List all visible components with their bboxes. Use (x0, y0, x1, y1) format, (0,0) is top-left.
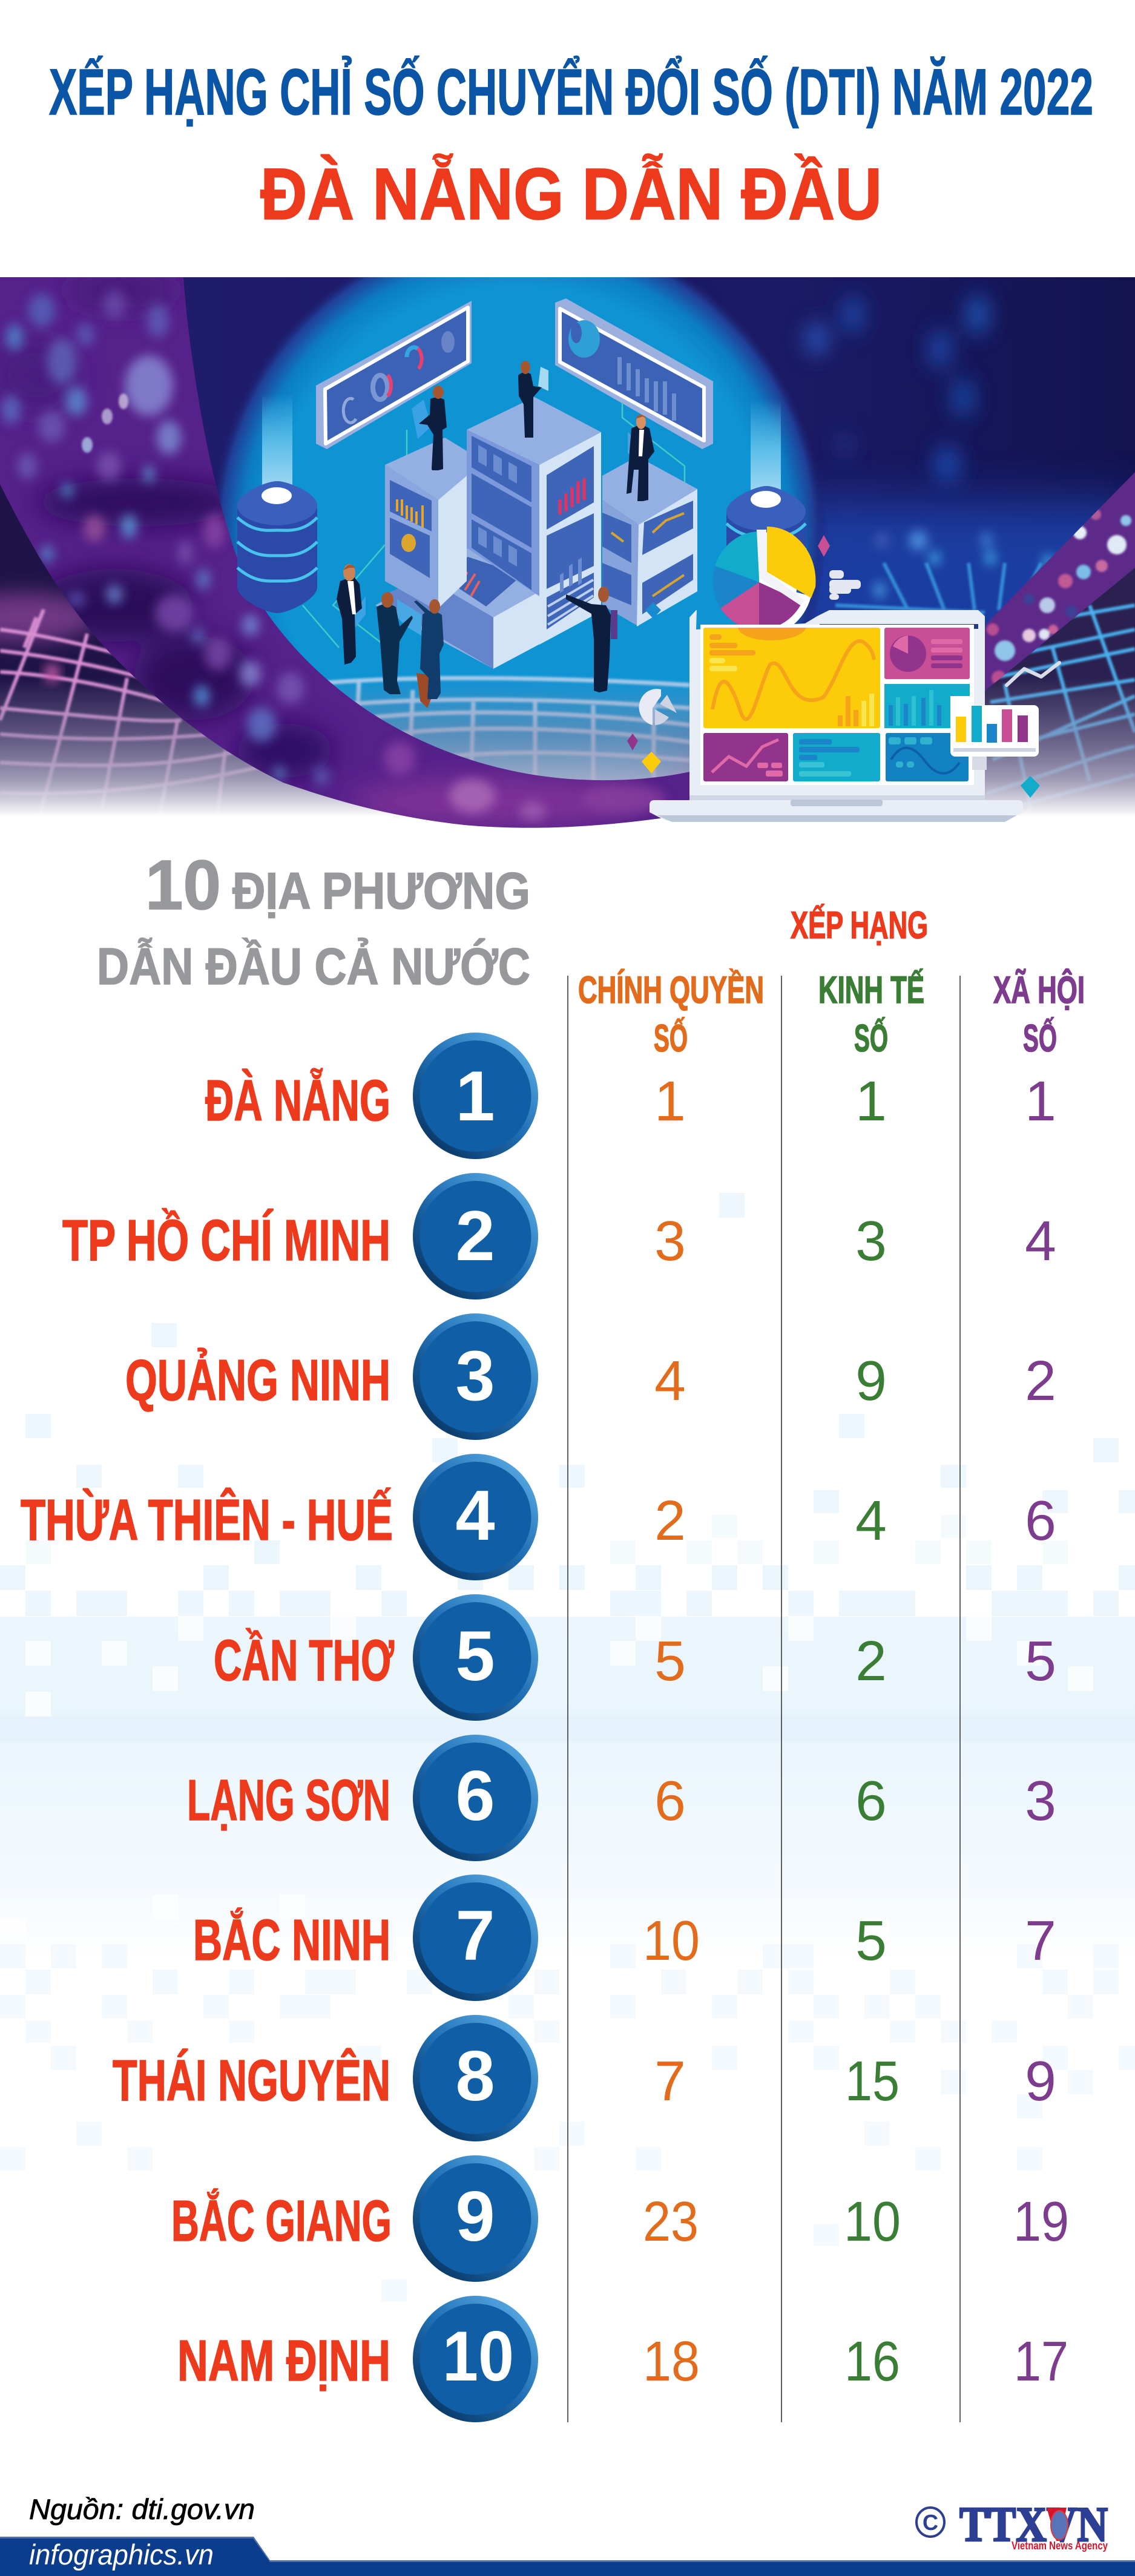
row 1 (205, 1033, 1056, 1159)
row 4: 4 (455, 1476, 495, 1555)
heading: ranking: XẾP HẠNG (791, 904, 928, 947)
row 9: 10 (844, 2190, 901, 2253)
hero bottom fade to white (0, 678, 1135, 841)
row 1: 1 (455, 1056, 495, 1135)
row 1: 1 (654, 1070, 686, 1132)
row 7: 10 (643, 1909, 700, 1972)
central cyan glow (218, 277, 824, 780)
row 6: LẠNG SƠN (187, 1768, 390, 1833)
row 5: 5 (1025, 1629, 1056, 1692)
purple ribbon left (0, 272, 696, 840)
console and base platform (375, 539, 601, 669)
background: pale pixel pattern (0, 1193, 1135, 2302)
laptop screen: yellow chart (703, 628, 880, 728)
row 8: THÁI NGUYÊN (113, 2048, 390, 2113)
row 6: 6 (455, 1756, 495, 1835)
row 10: NAM ĐỊNH (177, 2328, 390, 2393)
white line chart (1007, 663, 1059, 685)
laptop screen: purple line panel (703, 733, 788, 781)
row 3: 9 (855, 1349, 887, 1412)
column header: digital government: CHÍNH QUYỀN (578, 968, 764, 1011)
heading: 10 localities: 10 (145, 846, 221, 924)
column header: digital economy: KINH TẾ (818, 968, 924, 1011)
row 3: 3 (455, 1336, 495, 1415)
row 8: 7 (654, 2049, 686, 2112)
row 2: TP HỒ CHÍ MINH (62, 1208, 390, 1273)
footer band: infographics.vn (29, 2538, 214, 2571)
row 2: 3 (654, 1209, 686, 1272)
row 7: 7 (1025, 1909, 1056, 1972)
floor grid: left (0, 484, 258, 805)
floating dashboard panel left (316, 301, 472, 449)
row 8 (113, 2015, 1056, 2141)
TTXVN logo: TTXVN (959, 2497, 1108, 2552)
column header: digital economy (818, 968, 924, 1060)
heading: 10 localities: ĐỊA PHƯƠNG (232, 862, 530, 920)
laptop screen: teal bars panel (884, 684, 970, 728)
row 2: 3 (855, 1209, 887, 1272)
person on left block (412, 386, 447, 470)
row 7: 7 (455, 1896, 495, 1975)
title line 2: ĐÀ NẴNG DẪN ĐẦU (260, 153, 882, 235)
row 6: 6 (855, 1769, 887, 1832)
row 5 (214, 1594, 1056, 1721)
row 10: 17 (1014, 2330, 1068, 2393)
server cylinder left (237, 393, 317, 613)
row 4: 4 (855, 1489, 887, 1552)
hero illustration (0, 224, 1135, 841)
row 2 (62, 1173, 1056, 1300)
row 10 (177, 2296, 1068, 2422)
pie chart large (713, 527, 815, 636)
row 9: 23 (643, 2190, 699, 2253)
floating dashboard panel right (555, 298, 713, 449)
row 8: 8 (455, 2036, 495, 2115)
row 8: 15 (845, 2049, 900, 2112)
column header: digital society: SỐ (1023, 1017, 1057, 1060)
connector lines (303, 402, 685, 648)
row 4: 2 (654, 1489, 686, 1552)
people (337, 361, 654, 708)
row 10: 16 (844, 2330, 900, 2393)
mini pie icon (639, 689, 677, 725)
row 10: 18 (643, 2330, 700, 2393)
column header: digital government (578, 968, 764, 1060)
row 5: 2 (855, 1629, 887, 1692)
laptop (650, 610, 1023, 822)
tower screens (472, 436, 594, 629)
row 9 (171, 2155, 1069, 2282)
person bottom centre right (414, 599, 444, 708)
row 6 (187, 1735, 1056, 1861)
right block (602, 456, 697, 626)
purple ribbon right (985, 472, 1135, 691)
sparkles (627, 535, 1040, 798)
title (49, 55, 1093, 235)
row 7 (193, 1874, 1056, 2001)
person on right block (627, 415, 654, 501)
heading: 10 localities: DẪN ĐẦU CẢ NƯỚC (97, 938, 530, 996)
floor grid: centre (327, 678, 690, 787)
row 3 (125, 1313, 1056, 1440)
row 5: CẦN THƠ (214, 1628, 394, 1693)
left block (385, 438, 467, 611)
floating bars icon (829, 570, 861, 600)
row 2: 2 (455, 1196, 495, 1275)
TTXVN logo: Vietnam News Agency (1012, 2540, 1108, 2552)
row 4: 6 (1025, 1489, 1056, 1552)
row 5: 5 (455, 1616, 495, 1695)
person bottom centre (377, 592, 421, 694)
laptop screen: blue wave panel (886, 733, 969, 781)
row 8: 9 (1025, 2049, 1056, 2112)
row 3: 4 (654, 1349, 686, 1412)
row 9: 9 (455, 2177, 495, 2256)
row 4: THỪA THIÊN - HUẾ (21, 1487, 393, 1552)
row 3: QUẢNG NINH (125, 1347, 390, 1413)
person bottom left (337, 564, 366, 665)
row 1: ĐÀ NẴNG (205, 1068, 390, 1133)
row 9: 19 (1013, 2190, 1069, 2253)
row 1: 1 (855, 1070, 887, 1132)
centre tower (467, 397, 601, 645)
column header: digital economy: SỐ (854, 1017, 888, 1060)
TTXVN logo (916, 2497, 1108, 2552)
floor grid: right (834, 562, 1135, 804)
row 3: 2 (1025, 1349, 1056, 1412)
source note: Nguồn: dti.gov.vn (29, 2493, 255, 2525)
laptop screen: pink panel (884, 628, 970, 679)
row 2: 4 (1025, 1209, 1056, 1272)
row 7: BẮC NINH (193, 1907, 390, 1973)
bar card (950, 705, 1039, 770)
person right, pointing (566, 586, 617, 692)
row 6: 3 (1025, 1769, 1056, 1832)
column header: digital government: SỐ (654, 1017, 688, 1060)
row 5: 5 (654, 1629, 686, 1692)
footer band (0, 2537, 1135, 2576)
server cylinder right (726, 399, 806, 581)
heading: 10 localities (97, 846, 530, 996)
hero background: navy sky with blue lights (183, 277, 1135, 691)
row 4 (21, 1454, 1056, 1580)
column header: digital society (993, 968, 1085, 1060)
row 6: 6 (654, 1769, 686, 1832)
person on centre tower (518, 361, 548, 438)
row 9: BẮC GIANG (171, 2188, 392, 2253)
row 1: 1 (1025, 1070, 1056, 1132)
laptop screen: teal text panel (793, 733, 880, 781)
row 7: 5 (855, 1909, 887, 1972)
TTXVN logo: C (923, 2510, 938, 2535)
column header: digital society: XÃ HỘI (993, 968, 1085, 1011)
row 10: 10 (442, 2316, 514, 2396)
